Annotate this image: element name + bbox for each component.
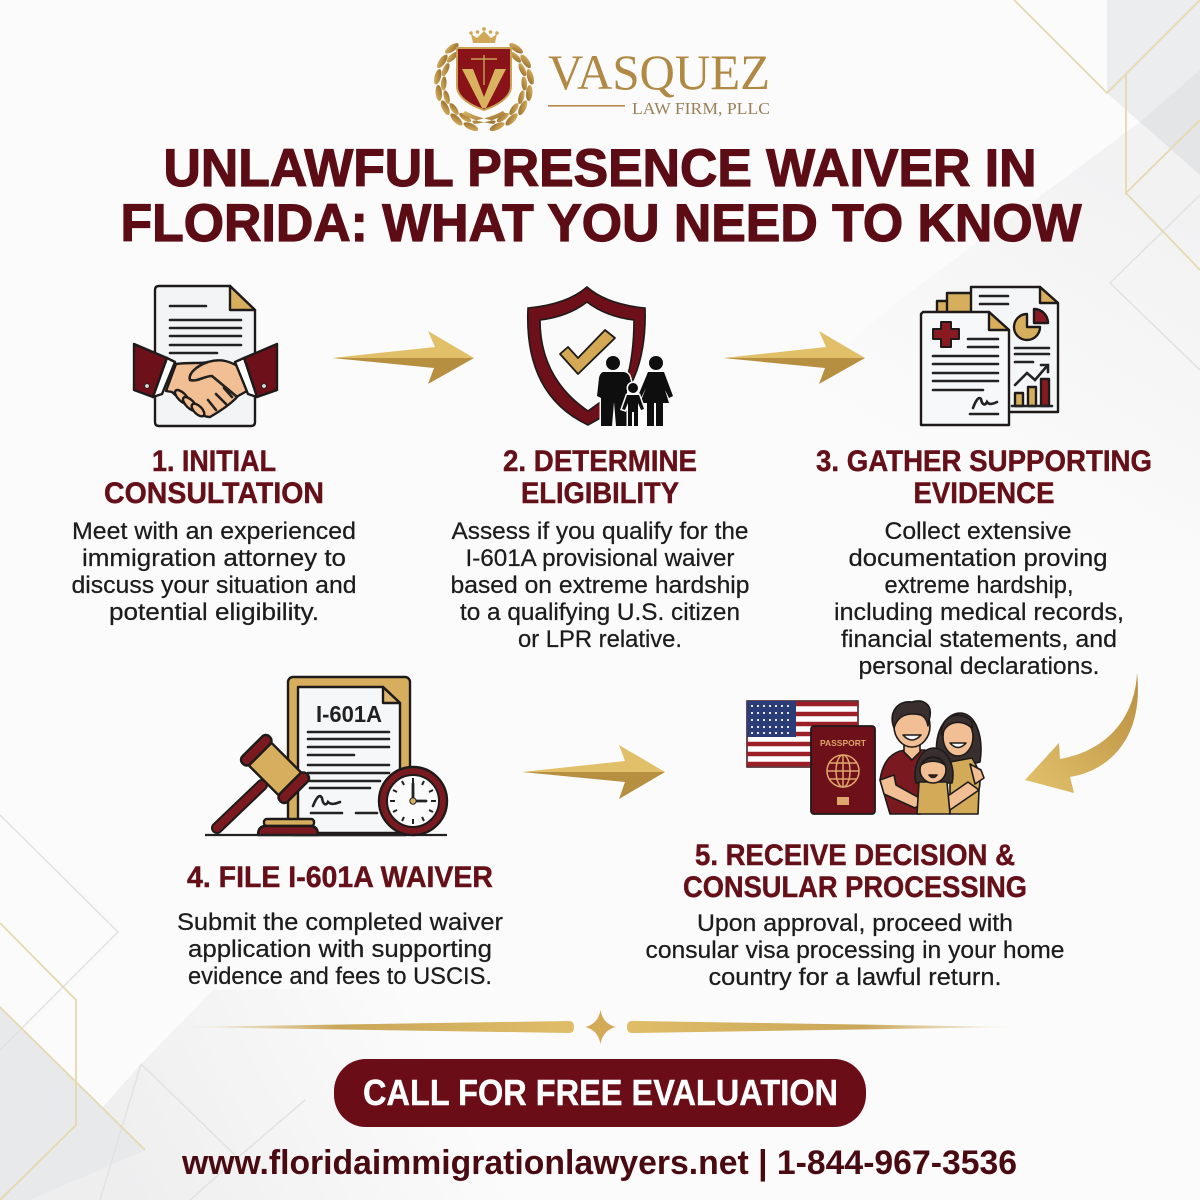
heading: step 1: CONSULTATION xyxy=(104,477,324,510)
body: step 1: potential eligibility. xyxy=(109,599,319,626)
body: step 2: I-601A provisional waiver xyxy=(466,545,734,572)
heading: step 2 xyxy=(503,445,697,510)
logo: Vasquez Law Firm xyxy=(433,27,770,133)
body: step 3: Collect extensive xyxy=(884,518,1072,545)
arrow: step 1 to step 2 xyxy=(332,331,474,384)
title: FLORIDA: WHAT YOU NEED TO KNOW xyxy=(120,194,1082,253)
heading: step 2: 2. DETERMINE xyxy=(503,445,697,478)
heading: step 3 xyxy=(816,445,1152,510)
step 5 text xyxy=(646,839,1064,991)
icon: family xyxy=(880,701,984,814)
heading: step 5 xyxy=(683,839,1027,904)
title xyxy=(120,139,1082,253)
icon: passport: PASSPORT xyxy=(820,738,867,748)
wordmark: VASQUEZ xyxy=(548,44,770,100)
heading: step 3: 3. GATHER SUPPORTING xyxy=(816,445,1152,478)
body: step 3: financial statements, and xyxy=(841,626,1117,653)
body: step 4 xyxy=(177,909,503,990)
step 2 text xyxy=(450,445,750,653)
arrow: step 2 to step 3 xyxy=(723,331,865,384)
website and phone: www.floridaimmigrationlawyers.net | 1-844-967-3536 xyxy=(181,1144,1017,1182)
icon: letter V on shield xyxy=(462,69,506,108)
body: step 1 xyxy=(72,518,356,626)
firm subtitle: LAW FIRM, PLLC xyxy=(632,99,770,118)
step 3 text xyxy=(816,445,1152,680)
heading: step 5: CONSULAR PROCESSING xyxy=(683,871,1027,904)
body: step 1: immigration attorney to xyxy=(82,545,346,572)
heading: step 4: 4. FILE I-601A WAIVER xyxy=(187,861,493,894)
body: step 4: application with supporting xyxy=(188,936,492,963)
body: step 1: Meet with an experienced xyxy=(72,518,356,545)
icon: I-601A form, gavel and clock: I-601A xyxy=(316,701,382,727)
icon: scales on shield xyxy=(471,55,497,85)
icon: US flag xyxy=(747,701,858,767)
body: step 4: Submit the completed waiver xyxy=(177,909,503,936)
step 1 text xyxy=(72,445,356,626)
body: step 2: based on extreme hardship xyxy=(450,572,750,599)
heading: step 1 xyxy=(104,445,324,510)
body: step 5: Upon approval, proceed with xyxy=(697,910,1013,937)
body: step 2: Assess if you qualify for the xyxy=(452,518,748,545)
body: step 3 xyxy=(834,518,1124,680)
icon: evidence documents xyxy=(921,287,1058,425)
heading: step 1: 1. INITIAL xyxy=(152,445,276,478)
arrow: curved from step 3 to step 5 xyxy=(1025,673,1138,793)
body: step 2 xyxy=(450,518,750,653)
icon: shield xyxy=(457,48,511,110)
call to action button: CALL FOR FREE EVALUATION xyxy=(363,1072,838,1113)
icon: passport xyxy=(811,726,875,814)
icon: crown xyxy=(469,27,499,43)
body: step 1: discuss your situation and xyxy=(72,572,356,599)
body: step 2: to a qualifying U.S. citizen xyxy=(460,599,740,626)
body: step 2: or LPR relative. xyxy=(518,626,682,653)
heading: step 3: EVIDENCE xyxy=(914,477,1054,510)
body: step 3: extreme hardship, xyxy=(884,572,1074,599)
icon: document with handshake xyxy=(134,286,277,426)
body: step 4: evidence and fees to USCIS. xyxy=(188,963,492,990)
body: step 5: consular visa processing in your home xyxy=(646,937,1064,964)
call to action button xyxy=(334,1059,866,1127)
arrow: step 4 to step 5 xyxy=(522,745,665,799)
icon: flag, passport and family xyxy=(747,701,984,814)
divider with gold star xyxy=(181,1010,1020,1044)
body: step 3: including medical records, xyxy=(834,599,1124,626)
icon: shield with check and family xyxy=(528,287,673,426)
body: step 3: personal declarations. xyxy=(858,653,1100,680)
icon: I-601A form, gavel and clock xyxy=(205,677,447,835)
body: step 3: documentation proving xyxy=(848,545,1108,572)
body: step 5 xyxy=(646,910,1064,991)
step 4 text xyxy=(177,861,503,990)
body: step 5: country for a lawful return. xyxy=(708,964,1002,991)
heading: step 2: ELIGIBILITY xyxy=(521,477,679,510)
title: UNLAWFUL PRESENCE WAIVER IN xyxy=(164,139,1036,198)
icon: laurel wreath xyxy=(433,41,535,133)
heading: step 5: 5. RECEIVE DECISION & xyxy=(695,839,1015,872)
